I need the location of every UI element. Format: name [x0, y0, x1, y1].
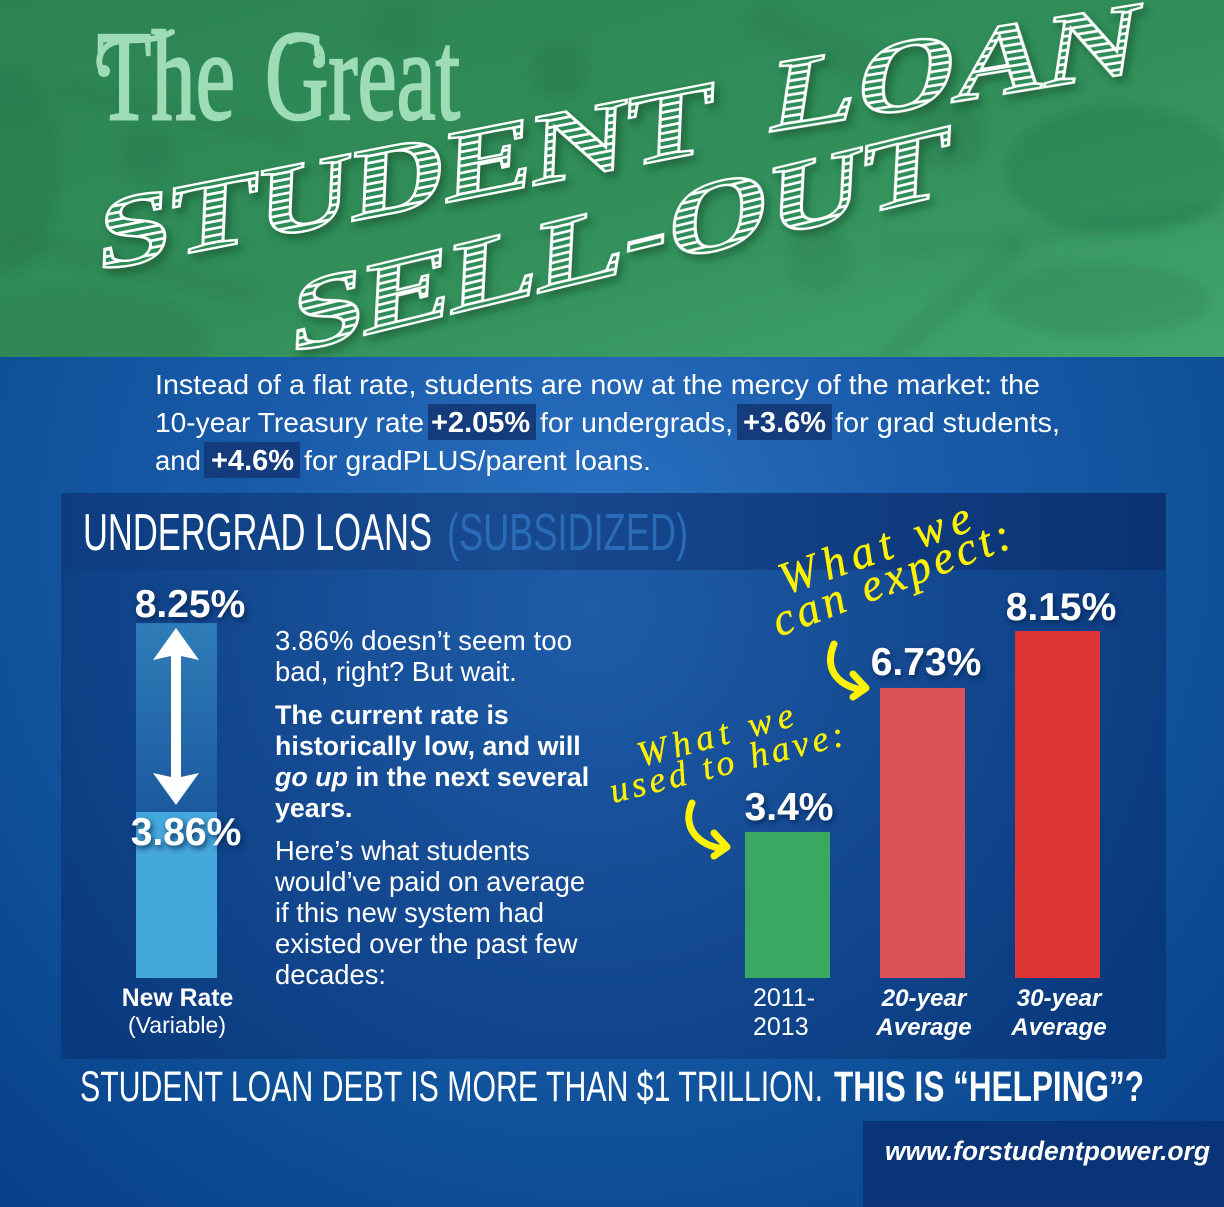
title: The Great: Great: [265, 5, 460, 147]
explanatory text block: historically low, and will: [275, 731, 581, 761]
banner: money background: [0, 0, 1224, 390]
panel heading: (SUBSIDIZED): [447, 504, 688, 562]
label: 2011-2013: 2011-: [753, 984, 815, 1012]
title: The Great: [97, 5, 460, 147]
website box: [863, 1121, 1224, 1207]
value: 8.25%: 8.25%: [135, 583, 245, 626]
closing statement: STUDENT LOAN DEBT IS MORE THAN $1 TRILLION.: [80, 1063, 823, 1111]
explanatory text block: years.: [275, 793, 352, 823]
explanatory text block: The current rate is: [275, 700, 509, 730]
annotation: what we used to have: What we: [633, 695, 798, 775]
highlight: +2.05%: [428, 404, 536, 440]
label: 20-year average: 20-year: [881, 985, 968, 1012]
intro text block: [155, 369, 1060, 478]
title: The Great: The: [97, 5, 235, 147]
title word: Student: STUDENT: [96, 58, 716, 294]
bar: 30-year average: [1015, 631, 1100, 978]
explanatory text block: decades:: [275, 959, 386, 990]
panel heading: [61, 493, 1166, 570]
intro text block: +4.6%: [211, 445, 294, 477]
bar label: New Rate: [122, 985, 233, 1012]
intro text block: and: [155, 445, 201, 476]
intro text block: +3.6%: [743, 407, 826, 439]
label: 20-year average: Average: [875, 1014, 972, 1041]
title: Student Loan Sell-Out: [96, 0, 1148, 376]
intro text block: Instead of a flat rate, students are now at the mercy of the market: the: [155, 369, 1040, 400]
value: 3.4%: 3.4%: [745, 786, 833, 829]
intro text block: 10-year Treasury rate: [155, 407, 424, 438]
label: 30-year average: Average: [1010, 1014, 1107, 1041]
intro text block: for gradPLUS/parent loans.: [304, 445, 651, 476]
bar: possible range up to 8.25%: [136, 623, 217, 812]
chart: historical rates: [745, 586, 1116, 1041]
explanatory text block: 3.86% doesn’t seem too: [275, 625, 572, 656]
value: 3.86%: 3.86%: [131, 811, 241, 854]
label: 2011-2013: 2013: [753, 1013, 809, 1041]
label: 30-year average: 30-year: [1017, 985, 1103, 1012]
chart: new rate bar: [122, 583, 245, 1038]
panel: undergrad loans: [61, 493, 1166, 1059]
intro text block: for grad students,: [835, 407, 1060, 438]
explanatory text block: bad, right? But wait.: [275, 656, 517, 687]
explanatory text block: [274, 625, 589, 990]
explanatory text block: would’ve paid on average: [274, 866, 585, 897]
explanatory text block: if this new system had: [275, 897, 544, 928]
website box: www.forstudentpower.org: [885, 1136, 1210, 1166]
highlight: +3.6%: [737, 404, 832, 440]
icon: curved arrow to 6.73%: [830, 644, 866, 697]
bar label: (Variable): [128, 1012, 226, 1038]
panel heading: UNDERGRAD LOANS: [83, 504, 432, 562]
intro text block: +2.05%: [431, 407, 530, 439]
icon: double-headed arrow: [153, 628, 199, 805]
value: 8.15%: 8.15%: [1006, 586, 1116, 629]
annotation: what we used to have: used to have:: [605, 714, 848, 811]
explanatory text block: existed over the past few: [275, 928, 578, 959]
highlight: +4.6%: [204, 442, 300, 478]
bar: 2011-2013: [745, 832, 830, 978]
annotation: what we can expect: can expect:: [764, 508, 1018, 646]
icon: curved arrow to 3.4%: [689, 803, 727, 856]
annotation: what we can expect: What we: [772, 491, 977, 604]
bar: 20-year average: [880, 688, 965, 978]
intro text block: for undergrads,: [540, 407, 733, 438]
title line 2: SELL-OUT: [289, 101, 953, 376]
value: 6.73%: 6.73%: [871, 641, 981, 684]
explanatory text block: go up in the next several: [274, 762, 589, 792]
bar: new rate 3.86%: [136, 812, 217, 978]
explanatory text block: Here’s what students: [275, 835, 530, 866]
